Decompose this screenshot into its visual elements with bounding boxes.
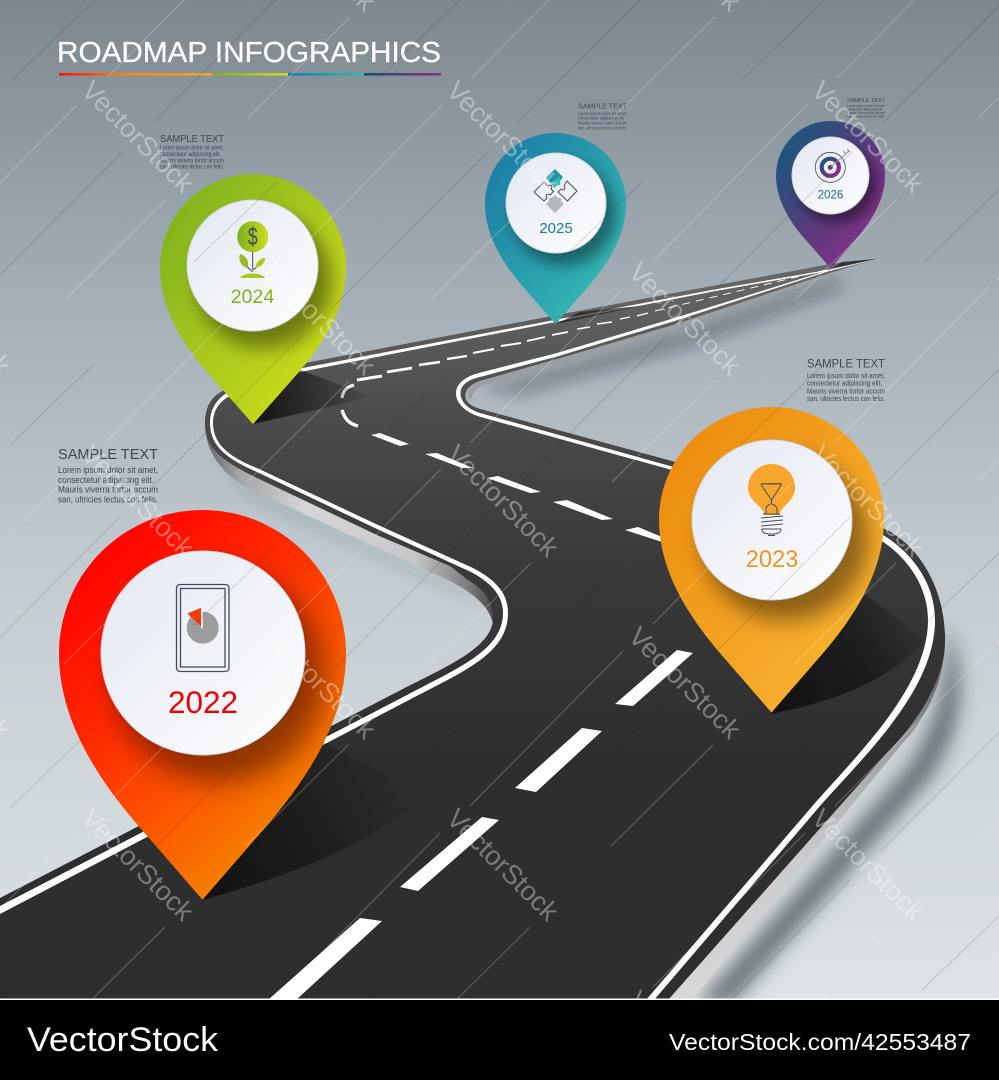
disc shadow	[113, 570, 325, 782]
white disc	[187, 200, 318, 331]
text block: 2022	[58, 446, 158, 506]
asphalt surface	[0, 258, 945, 1000]
pin body	[160, 174, 346, 424]
watermark text: VectorStock	[623, 621, 747, 745]
white disc	[506, 153, 606, 253]
icon: phone with pie chart	[176, 584, 229, 672]
year 2024: 2024	[231, 286, 274, 308]
icon: money plant: $	[248, 222, 258, 251]
text block: 2025: Mauris viverra tortor accum	[578, 121, 627, 126]
year 2025: 2025	[539, 220, 573, 237]
watermark text: VectorStock	[441, 75, 565, 199]
watermark text: VectorStock	[806, 803, 930, 927]
white edge line: left	[0, 259, 878, 914]
text block: 2022: SAMPLE TEXT	[58, 446, 158, 463]
text block: 2024	[160, 134, 224, 171]
watermark text: VectorStock	[76, 75, 200, 199]
text block: 2025: san, ultricies lectus con felis.	[578, 125, 627, 130]
watermark text: VectorStock	[258, 621, 382, 745]
icon: puzzle pieces	[534, 169, 577, 213]
white edge line: right	[456, 259, 935, 1000]
year 2026: 2026	[818, 189, 843, 202]
watermark text: VectorStock	[441, 803, 565, 927]
text block: 2025	[578, 102, 627, 130]
text block: 2025: SAMPLE TEXT	[578, 102, 627, 110]
centre dashes	[268, 433, 693, 1000]
text block: 2022: Mauris viverra tortor accum	[58, 484, 158, 496]
watermark text: VectorStock	[806, 439, 930, 563]
pin body	[659, 407, 884, 713]
text block: 2025: consectetur adipiscing elit.	[578, 116, 625, 121]
year 2023: 2023	[746, 547, 798, 573]
road edge: left curb	[205, 423, 494, 632]
rainbow title underline	[59, 73, 441, 76]
pin: 2026	[776, 121, 885, 268]
watermark text: V	[623, 985, 657, 1019]
pin: 2023	[659, 407, 884, 713]
pin body	[776, 121, 885, 268]
text block: 2023: san, ultricies lectus con felis.	[807, 394, 885, 403]
watermark text: VectorStock	[258, 257, 382, 381]
icon: money plant	[237, 221, 268, 278]
text block: 2026: consectetur adipiscing elit.	[847, 107, 883, 111]
text block: 2023: SAMPLE TEXT	[807, 356, 886, 370]
watermark text: VectorStock	[441, 439, 565, 563]
text block: 2024: SAMPLE TEXT	[160, 134, 224, 145]
text block: 2025: Lorem ipsum dolor sit amet,	[578, 111, 627, 116]
text block: 2023: Mauris viverra tortor accum	[807, 386, 885, 395]
pin body	[59, 510, 346, 900]
road shadows	[215, 278, 960, 1005]
pin body	[485, 133, 626, 324]
text block: 2024: san, ultricies lectus con felis.	[160, 165, 224, 171]
text block: 2026: Lorem ipsum dolor sit amet,	[847, 104, 885, 108]
text block: 2023: consectetur adipiscing elit.	[807, 379, 882, 388]
footer bar	[0, 998, 999, 1080]
text block: 2026: san, ultricies lectus con felis.	[847, 115, 885, 119]
watermark text: VectorStock	[76, 439, 200, 563]
text block: 2024: consectetur adipiscing elit.	[160, 152, 221, 158]
text block: 2023	[807, 356, 886, 403]
text block: 2026: Mauris viverra tortor accum	[847, 111, 885, 115]
disc shadow	[512, 162, 616, 266]
disc shadow	[797, 144, 877, 224]
text block: 2024: Mauris viverra tortor accum	[160, 158, 224, 164]
white disc	[692, 440, 852, 600]
text block: 2022: Lorem ipsum dolor sit amet,	[58, 465, 158, 476]
text block: 2022: consectetur adipiscing elit.	[58, 475, 154, 486]
year 2022: 2022	[168, 684, 238, 720]
pin shadows on the road	[203, 259, 925, 900]
title: ROADMAP INFOGRAPHICS	[57, 37, 441, 69]
watermark text: VectorStock	[623, 257, 747, 381]
icon: target with arrow	[815, 149, 850, 182]
road	[0, 258, 945, 1000]
text block: 2024: Lorem ipsum dolor sit amet,	[160, 146, 224, 152]
text block: 2023: Lorem ipsum dolor sit amet,	[807, 371, 885, 380]
footer brand: VectorStock	[27, 1021, 219, 1059]
disc shadow	[702, 455, 868, 621]
watermark text: VectorStock	[806, 75, 930, 199]
white disc	[792, 137, 869, 214]
disc shadow	[196, 213, 332, 349]
road edge: right curb	[640, 632, 945, 1000]
text block: 2022: san, ultricies lectus con felis.	[58, 494, 158, 506]
pin: 2025	[485, 133, 626, 324]
white disc	[101, 551, 305, 755]
text block: 2026	[847, 98, 885, 119]
pin: 2024	[160, 174, 346, 424]
icon: light bulb	[748, 464, 795, 536]
footer image id: VectorStock.com/42553487	[669, 1029, 971, 1055]
pin: 2022	[59, 510, 346, 900]
watermark text: VectorStock	[76, 803, 200, 927]
text block: 2026: SAMPLE TEXT	[847, 98, 885, 104]
road edge: far curb	[468, 273, 835, 399]
